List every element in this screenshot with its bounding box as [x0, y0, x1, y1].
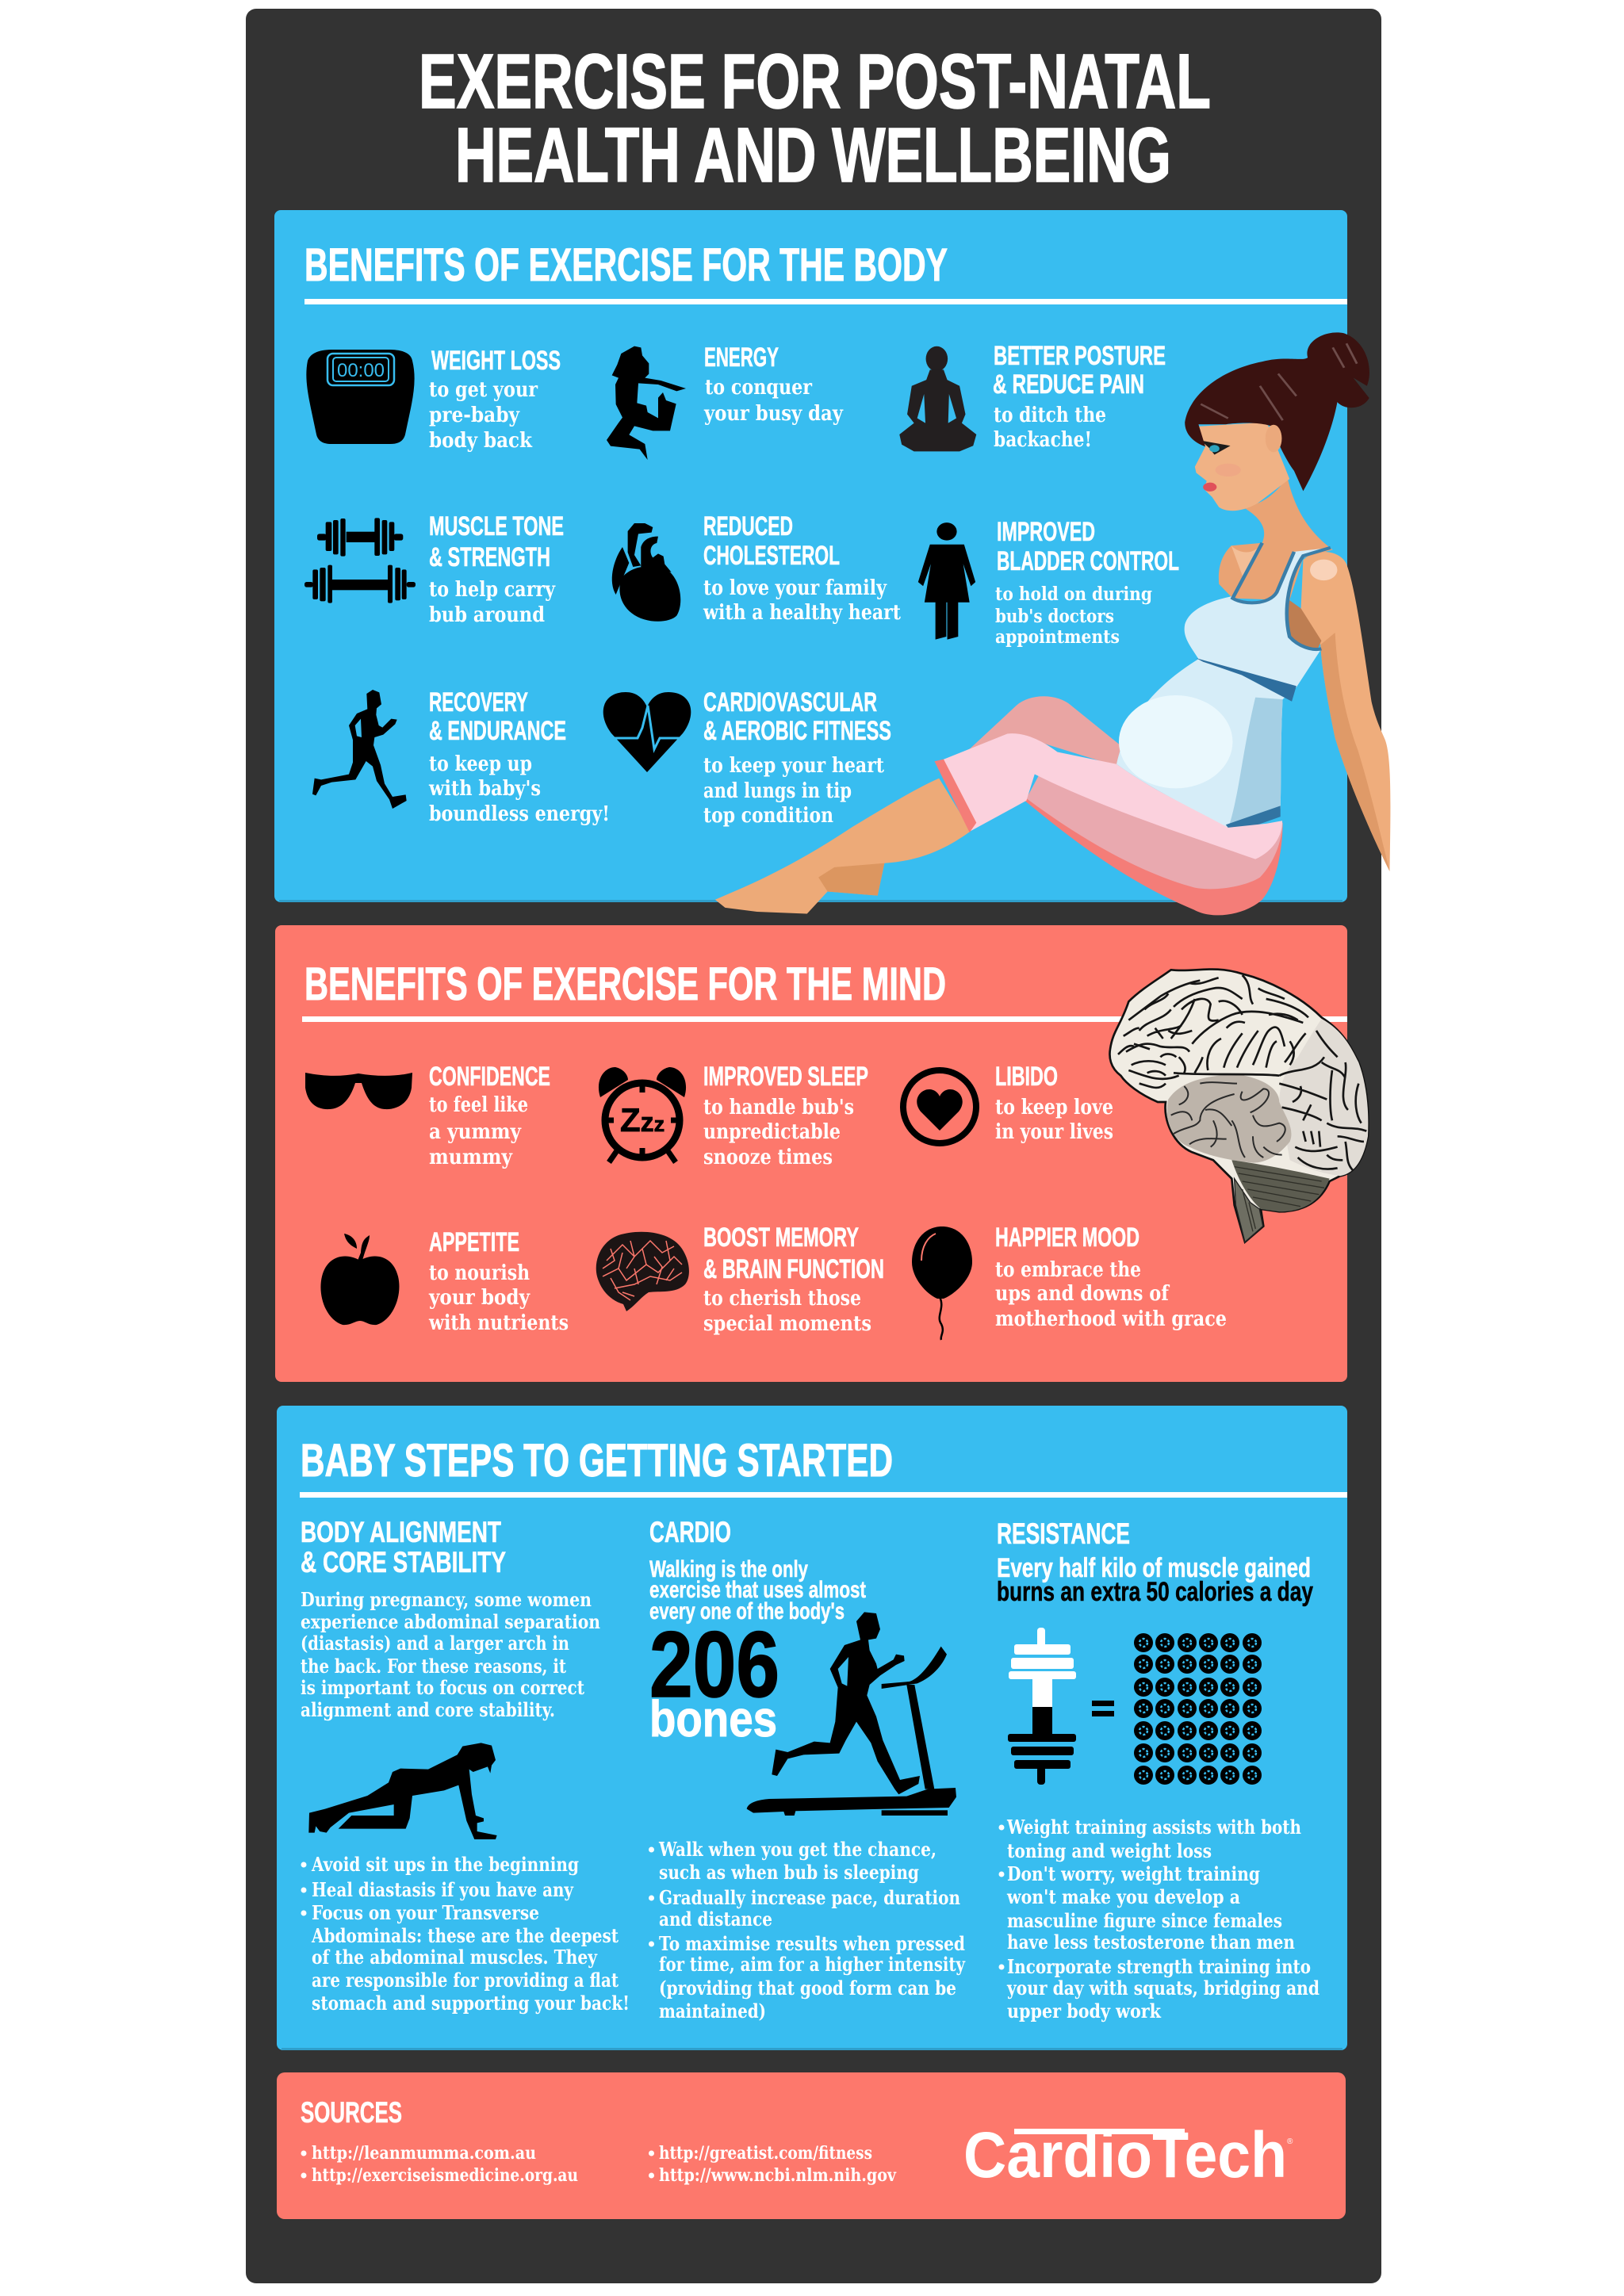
- benefit: improved sleep: IMPROVED SLEEP: [703, 1062, 868, 1092]
- list: resistance tips: have less testosterone than men: [1007, 1931, 1295, 1954]
- source links: http://leanmumma.com.au: [312, 2143, 536, 2164]
- benefit: energy: your busy day: [703, 402, 844, 426]
- benefit: better posture: [993, 341, 1166, 452]
- list: body alignment tips: Abdominals: these are the deepest: [311, 1924, 619, 1947]
- benefit: better posture: backache!: [994, 428, 1092, 452]
- benefit: confidence: [429, 1062, 550, 1169]
- column: cardio intro: CARDIO: [649, 1516, 731, 1548]
- icon: woman symbol: [918, 522, 975, 640]
- icon: anatomical heart: [612, 523, 680, 622]
- icon: heart in circle: [903, 1070, 976, 1143]
- list: body alignment tips: Avoid sit ups in the beginning: [311, 1853, 579, 1876]
- icon: dumbbells: [304, 518, 416, 603]
- title: EXERCISE FOR POST-NATAL: [419, 38, 1211, 124]
- panel: benefits for the mind: [275, 925, 1347, 1382]
- list: body alignment tips: Focus on your Transverse: [312, 1901, 539, 1924]
- benefit: muscle tone: & STRENGTH: [429, 542, 550, 572]
- column: resistance intro: burns an extra 50 calories a day: [997, 1577, 1313, 1607]
- benefit: recovery: & ENDURANCE: [429, 716, 566, 746]
- list: cardio tips: and distance: [659, 1908, 772, 1931]
- list: cardio tips: such as when bub is sleeping: [659, 1861, 919, 1884]
- benefit: muscle tone: bub around: [429, 603, 545, 627]
- benefit: boost memory: special moments: [703, 1312, 871, 1336]
- illustration: large brain: [1109, 969, 1368, 1242]
- benefit: libido: to keep love: [995, 1096, 1113, 1119]
- benefit: weight loss: to get your: [429, 378, 538, 402]
- list: cardio tips: (providing that good form can be: [659, 1976, 956, 1999]
- benefit: appetite: [428, 1227, 569, 1335]
- column: cardio intro: Walking is the only: [649, 1556, 808, 1582]
- panel: baby steps: [277, 1406, 1347, 2050]
- benefit: cholesterol: with a healthy heart: [703, 601, 901, 625]
- benefit: improved sleep: to handle bub's: [703, 1096, 854, 1119]
- benefit: appetite: your body: [428, 1286, 530, 1310]
- column: body alignment intro: (diastasis) and a larger arch in: [301, 1632, 569, 1655]
- benefit: boost memory: [703, 1223, 884, 1336]
- dark background card: [246, 9, 1381, 2283]
- illustration: pregnant woman sitting: [715, 332, 1390, 915]
- list: resistance tips: toning and weight loss: [1007, 1839, 1212, 1862]
- icon: small brain: [596, 1232, 689, 1311]
- brain outline and lobes: [1109, 969, 1368, 1242]
- logo: CardioTech: ®: [1287, 2137, 1293, 2146]
- benefit: cholesterol: [703, 511, 901, 625]
- list: body alignment tips: are responsible for providing a flat: [312, 1969, 619, 1992]
- column: cardio intro: exercise that uses almost: [649, 1577, 866, 1603]
- list: body alignment tips: stomach and supporting your back!: [312, 1992, 630, 2015]
- benefit: bladder control: [995, 517, 1179, 648]
- stat: 206 bones: bones: [649, 1690, 777, 1747]
- benefit: bladder control: bub's doctors: [995, 606, 1114, 627]
- benefit: weight loss: [429, 346, 561, 453]
- benefit: better posture: to ditch the: [994, 404, 1106, 427]
- benefit: confidence: to feel like: [429, 1093, 528, 1117]
- benefit: muscle tone: to help carry: [429, 578, 556, 602]
- heading: mind benefits: BENEFITS OF EXERCISE FOR THE MIND: [304, 959, 946, 1010]
- list: resistance tips: Weight training assists with both: [1006, 1816, 1301, 1839]
- column: resistance intro: RESISTANCE: [997, 1517, 1130, 1550]
- benefit: improved sleep: snooze times: [703, 1146, 833, 1169]
- column: body alignment intro: experience abdominal separation: [301, 1610, 600, 1633]
- list: body alignment tips: Heal diastasis if you have any: [312, 1878, 574, 1901]
- column: body alignment intro: During pregnancy, some women: [301, 1588, 592, 1611]
- icon: apple: [320, 1234, 399, 1325]
- benefit: weight loss: pre-baby: [429, 404, 520, 427]
- benefit: improved sleep: [703, 1062, 868, 1169]
- list: resistance tips: won't make you develop a: [1006, 1885, 1240, 1908]
- heading: body benefits: BENEFITS OF EXERCISE FOR THE BODY: [304, 239, 948, 291]
- source links: http://exerciseismedicine.org.au: [312, 2165, 578, 2186]
- column: resistance intro: Every half kilo of muscle gained: [997, 1553, 1311, 1583]
- list: cardio tips: for time, aim for a higher intensity: [659, 1953, 966, 1976]
- list: cardio tips: Walk when you get the chance,: [658, 1838, 936, 1861]
- source links: http://www.ncbi.nlm.nih.gov: [659, 2165, 897, 2186]
- benefit: happier mood: HAPPIER MOOD: [995, 1223, 1139, 1253]
- benefit: bladder control: to hold on during: [995, 584, 1152, 605]
- benefit: recovery: with baby's: [428, 777, 541, 801]
- icon: heart with pulse: [603, 692, 691, 772]
- benefit: confidence: mummy: [429, 1146, 513, 1169]
- back arm: [1301, 552, 1390, 871]
- icon: grid of 42 plates: [1134, 1633, 1262, 1785]
- column: resistance intro: [997, 1517, 1313, 1607]
- benefit: cholesterol: CHOLESTEROL: [703, 541, 840, 571]
- column: body alignment intro: the back. For these reasons, it: [301, 1655, 566, 1678]
- benefit: energy: to conquer: [705, 376, 812, 400]
- benefit: appetite: APPETITE: [429, 1227, 519, 1257]
- column: body alignment intro: [301, 1516, 600, 1721]
- icon: alarm clock: Zzz: [620, 1101, 665, 1138]
- list: body alignment tips: [301, 1853, 630, 2015]
- benefit: libido: in your lives: [995, 1120, 1113, 1144]
- near calf and foot: [715, 779, 971, 914]
- icon: treadmill runner: [747, 1612, 956, 1816]
- benefit: boost memory: & BRAIN FUNCTION: [703, 1254, 884, 1284]
- benefit: muscle tone: [429, 511, 564, 627]
- icon: runner: [312, 690, 407, 809]
- benefit: cholesterol: to love your family: [703, 576, 887, 600]
- benefit: cardiovascular: & AEROBIC FITNESS: [703, 716, 891, 746]
- icon: meditating figure: [899, 346, 976, 451]
- icon: equals sign: [1092, 1701, 1114, 1716]
- stat: 206 bones: [649, 1613, 779, 1747]
- icon: jumping woman: [607, 346, 686, 460]
- benefit: cardiovascular: top condition: [703, 804, 833, 828]
- benefit: libido: LIBIDO: [995, 1062, 1058, 1092]
- benefit: cardiovascular: [703, 687, 891, 828]
- logo: CardioTech: CardioTech: [963, 2119, 1287, 2191]
- benefit: bladder control: BLADDER CONTROL: [997, 546, 1179, 576]
- heading: baby steps: BABY STEPS TO GETTING STARTED: [301, 1435, 893, 1487]
- benefit: cardiovascular: to keep your heart: [703, 754, 884, 778]
- benefit: weight loss: body back: [429, 429, 533, 453]
- dress: [1116, 543, 1331, 828]
- benefit: better posture: BETTER POSTURE: [994, 341, 1166, 371]
- title: HEALTH AND WELLBEING: [455, 112, 1171, 198]
- neck and chest: [1219, 477, 1333, 600]
- source links: [301, 2143, 897, 2186]
- icon: bathroom scale: 00:00: [337, 360, 385, 381]
- column: body alignment intro: BODY ALIGNMENT: [301, 1516, 501, 1548]
- benefit: bladder control: IMPROVED: [997, 517, 1095, 547]
- benefit: recovery: RECOVERY: [429, 687, 528, 718]
- benefit: confidence: a yummy: [429, 1120, 522, 1144]
- benefit: boost memory: BOOST MEMORY: [703, 1223, 859, 1253]
- benefit: energy: [703, 342, 844, 426]
- benefit: boost memory: to cherish those: [703, 1287, 861, 1311]
- list: cardio tips: Gradually increase pace, duration: [659, 1886, 960, 1909]
- benefit: appetite: with nutrients: [428, 1311, 569, 1335]
- list: cardio tips: maintained): [659, 1999, 766, 2022]
- benefit: confidence: CONFIDENCE: [429, 1062, 550, 1092]
- benefit: libido: [995, 1062, 1113, 1144]
- list: resistance tips: Incorporate strength training into: [1007, 1955, 1311, 1978]
- title: [419, 38, 1211, 198]
- benefit: recovery: to keep up: [429, 752, 532, 776]
- benefit: recovery: [428, 687, 610, 826]
- column: body alignment intro: alignment and core stability.: [301, 1698, 555, 1721]
- hair: [1185, 332, 1369, 491]
- list: resistance tips: Don't worry, weight training: [1007, 1862, 1260, 1885]
- column: cardio intro: [649, 1516, 866, 1624]
- benefit: bladder control: appointments: [995, 626, 1120, 648]
- far leg: [967, 696, 1121, 766]
- panel: benefits for the body: [274, 210, 1347, 902]
- benefit: muscle tone: MUSCLE TONE: [429, 511, 564, 541]
- stat: 206 bones: 206: [649, 1613, 779, 1717]
- heading: sources: SOURCES: [301, 2096, 402, 2129]
- column: body alignment intro: is important to focus on correct: [301, 1676, 584, 1699]
- benefit: appetite: to nourish: [429, 1261, 530, 1285]
- list: body alignment tips: of the abdominal muscles. They: [312, 1946, 598, 1969]
- source links: http://greatist.com/fitness: [659, 2143, 872, 2164]
- benefit: happier mood: [995, 1223, 1227, 1331]
- benefit: happier mood: motherhood with grace: [995, 1307, 1227, 1331]
- list: cardio tips: [649, 1838, 966, 2022]
- icon: bathroom scale: [306, 350, 415, 444]
- benefit: better posture: & REDUCE PAIN: [993, 369, 1144, 400]
- pants: [1025, 770, 1283, 915]
- icon: half white half black dumbbell: [1008, 1628, 1076, 1785]
- benefit: cardiovascular: CARDIOVASCULAR: [703, 687, 877, 718]
- list: resistance tips: masculine figure since females: [1007, 1909, 1282, 1932]
- icon: plank woman: [308, 1743, 497, 1839]
- benefit: happier mood: ups and downs of: [995, 1282, 1170, 1306]
- list: cardio tips: To maximise results when pressed: [659, 1932, 965, 1955]
- benefit: cholesterol: REDUCED: [703, 511, 793, 541]
- benefit: weight loss: WEIGHT LOSS: [431, 346, 561, 376]
- list: resistance tips: [999, 1816, 1320, 2022]
- column: cardio intro: every one of the body's: [649, 1598, 845, 1624]
- icon: sunglasses: [305, 1073, 412, 1109]
- benefit: recovery: boundless energy!: [429, 802, 610, 826]
- list: resistance tips: your day with squats, bridging and: [1006, 1976, 1320, 1999]
- benefit: cardiovascular: and lungs in tip: [703, 779, 852, 803]
- head: [1195, 423, 1289, 511]
- benefit: happier mood: to embrace the: [995, 1258, 1141, 1282]
- panel: sources: [277, 2072, 1346, 2219]
- icon: balloon: [912, 1226, 972, 1340]
- benefit: improved sleep: unpredictable: [703, 1120, 841, 1144]
- list: resistance tips: upper body work: [1007, 1999, 1162, 2022]
- column: body alignment intro: & CORE STABILITY: [301, 1546, 506, 1578]
- benefit: energy: ENERGY: [704, 342, 779, 373]
- icon: alarm clock: [599, 1067, 686, 1162]
